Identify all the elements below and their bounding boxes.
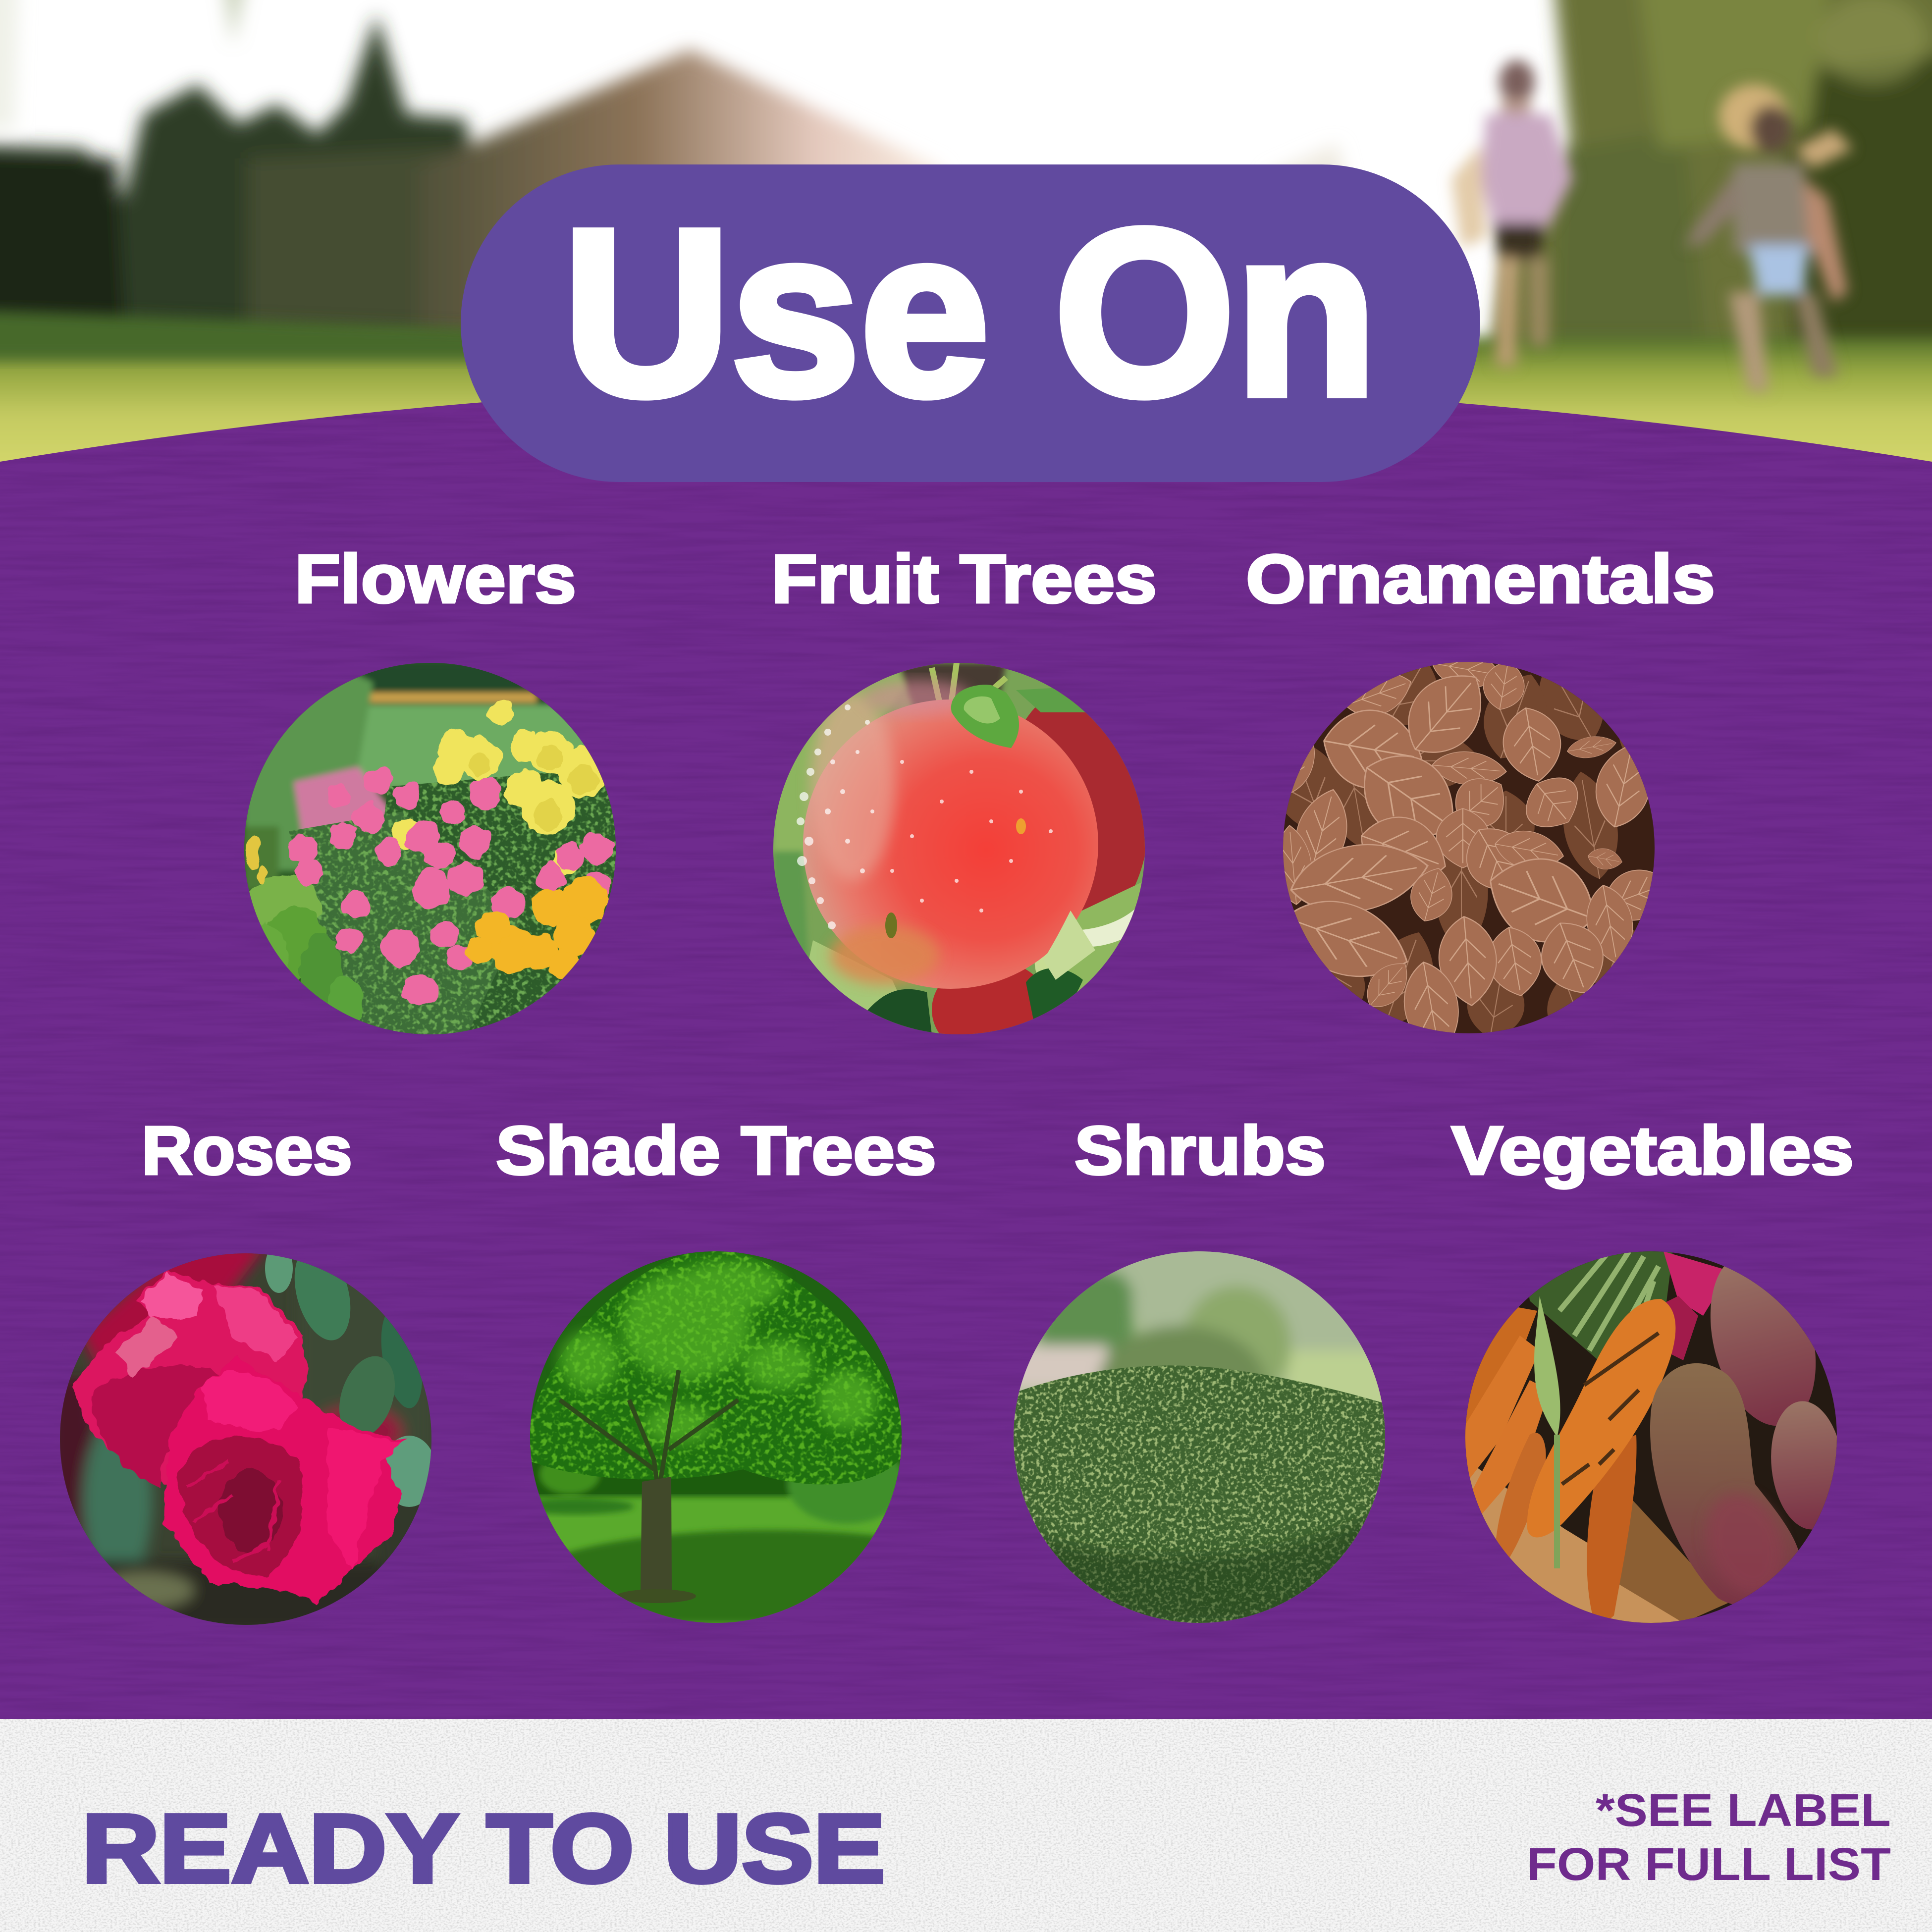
title: Use On	[563, 180, 1377, 445]
label: Shade Trees: Shade Trees	[496, 1113, 936, 1189]
photo circle: flowers	[239, 663, 616, 1034]
text: ready to use: READY TO USE	[82, 1794, 885, 1903]
child right	[1684, 84, 1853, 391]
text: see label note	[1527, 1784, 1891, 1890]
heading pill	[461, 164, 1480, 482]
background photo: blurred yard with house and children	[0, 0, 1932, 495]
panel: footer band	[0, 1719, 1932, 1932]
label: Flowers: Flowers	[295, 541, 576, 617]
label: Vegetables: Vegetables	[1451, 1113, 1854, 1189]
child left	[1451, 60, 1573, 367]
label: Shrubs: Shrubs	[1074, 1113, 1326, 1189]
label: Roses: Roses	[142, 1113, 352, 1189]
panel: purple textured background	[0, 347, 1932, 1719]
photo circle: ornamentals leaves	[1283, 662, 1655, 1033]
photo circle: apple	[773, 663, 1150, 1059]
label: Ornamentals: Ornamentals	[1246, 541, 1715, 617]
photo circle: roses	[50, 1239, 441, 1635]
text: see label note: FOR FULL LIST	[1527, 1838, 1891, 1890]
photo circle: shade tree	[515, 1246, 907, 1623]
text: see label note: *SEE LABEL	[1596, 1784, 1891, 1836]
label: Fruit Trees: Fruit Trees	[771, 541, 1157, 617]
photo circle: shrubs	[1004, 1241, 1395, 1628]
photo circle: vegetables	[1465, 1242, 1849, 1628]
